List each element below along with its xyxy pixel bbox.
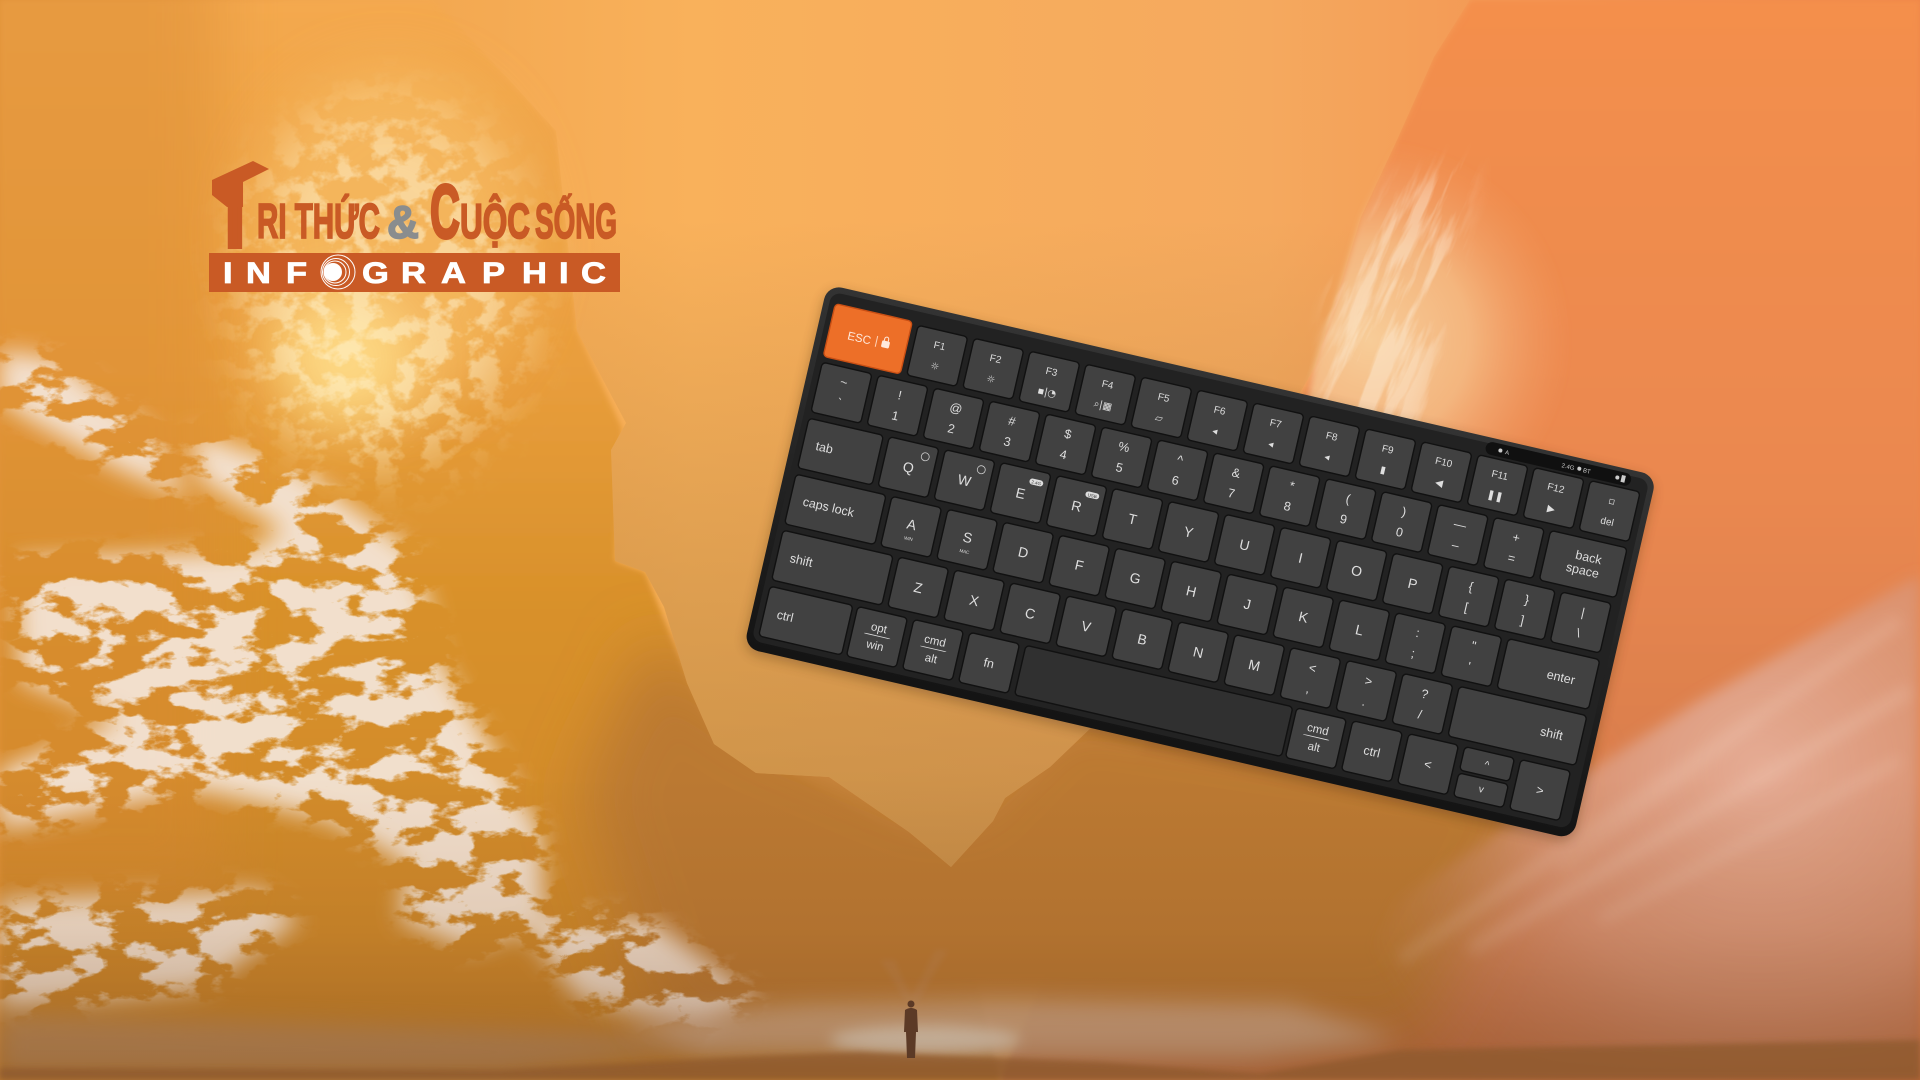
logo wordmark: SỐNG [535, 194, 617, 249]
logo banner: INFOGRAPHIC: INFOGRAPHIC [223, 256, 606, 289]
keyboard row: home keys: K [1297, 608, 1310, 626]
keyboard row: home keys: G [1128, 569, 1142, 587]
keyboard row: shift keys: V [1080, 617, 1093, 635]
keyboard row: number keys: 4 [1058, 447, 1068, 462]
keyboard row: home keys: L [1354, 621, 1365, 639]
keyboard row: function keys: ⌕|▦ [1093, 398, 1113, 413]
keyboard row: bottom modifier keys and arrows: alt [924, 652, 939, 667]
keyboard row: function keys: ❚❚ [1486, 489, 1504, 504]
keyboard row: shift keys: , [1305, 682, 1311, 696]
keyboard row: shift keys: > [1363, 674, 1374, 689]
keyboard row: function keys: F1 [932, 340, 947, 353]
keyboard row: home keys: ' [1466, 659, 1472, 674]
keyboard row: bottom modifier keys and arrows: fn [982, 655, 996, 671]
keyboard row: function keys: F2 [988, 353, 1003, 366]
keyboard row: function keys: F7 [1269, 418, 1283, 431]
keyboard row: number keys: 5 [1114, 460, 1124, 475]
keyboard row: shift keys: ? [1420, 687, 1430, 702]
keyboard row: QWERTY keys: O [1350, 562, 1364, 580]
keyboard row: function keys: ☼ [985, 374, 996, 386]
keyboard row: number keys: $ [1063, 427, 1073, 442]
keyboard row: QWERTY keys: R [1070, 497, 1083, 515]
logo: Tri thuc & Cuoc song Infographic [209, 161, 620, 292]
keyboard row: bottom modifier keys and arrows: ctrl [1362, 743, 1382, 760]
keyboard row: shift keys [772, 530, 1587, 765]
keyboard row: function keys: ▶ [1546, 503, 1556, 516]
keyboard status bar: A [1504, 450, 1510, 457]
keyboard row: number keys: ) [1401, 505, 1408, 519]
keyboard row: number keys: 3 [1002, 434, 1012, 449]
keyboard status bar [1484, 441, 1632, 487]
keyboard row: number keys: – [1450, 538, 1460, 553]
keyboard row: function keys: ▮ [1379, 465, 1387, 477]
keyboard row: QWERTY keys: { [1467, 580, 1475, 594]
keyboard row: number keys: % [1117, 439, 1131, 455]
keyboard row: function keys: F3 [1045, 366, 1059, 379]
keyboard row: function keys: ◀ [1434, 477, 1444, 490]
keyboard row: number keys: 7 [1226, 486, 1236, 501]
keyboard row: shift keys: shift [1539, 724, 1565, 743]
keyboard row: function keys: ◂ [1323, 452, 1331, 464]
keyboard row: QWERTY keys: USB [1087, 492, 1097, 499]
keyboard row: function keys: F8 [1325, 431, 1339, 444]
keyboard row: function keys [907, 325, 1640, 542]
keyboard row: number keys: * [1288, 479, 1296, 493]
key: ESC orange [823, 304, 912, 374]
keyboard row: home keys: A [905, 516, 919, 533]
keyboard row: number keys: 2 [946, 421, 956, 437]
keyboard row: function keys: ◂ [1267, 439, 1275, 451]
keyboard row: QWERTY keys: Y [1182, 523, 1196, 541]
keyboard row: number keys: — [1452, 517, 1468, 533]
keyboard row: number keys: 0 [1394, 525, 1404, 540]
keyboard row: shift keys: M [1247, 656, 1262, 674]
keyboard row: function keys: F10 [1434, 456, 1454, 470]
keyboard row: bottom modifier keys and arrows: v [1477, 784, 1485, 796]
keyboard row: shift keys: C [1023, 604, 1037, 622]
keyboard row: number keys: 9 [1338, 512, 1348, 527]
logo wordmark: RI THỨC [257, 194, 380, 249]
keyboard row: QWERTY keys [797, 418, 1611, 653]
keyboard row: home keys: " [1470, 639, 1477, 653]
keyboard row: shift keys: / [1417, 707, 1424, 722]
keyboard row: number keys: ( [1344, 492, 1353, 506]
keyboard row: QWERTY keys: [ [1463, 600, 1470, 615]
keyboard body [743, 284, 1657, 843]
keyboard row: home keys [785, 474, 1600, 709]
keyboard row: function keys: F11 [1490, 469, 1509, 483]
keyboard row: QWERTY keys: T [1127, 510, 1139, 528]
keyboard row: home keys: S [961, 529, 974, 546]
keyboard row: QWERTY keys: | [1580, 606, 1586, 620]
keyboard row: number keys: + [1511, 530, 1521, 545]
icon: person silhouette in the canyon [904, 1000, 918, 1058]
keyboard row: home keys: ; [1410, 646, 1416, 661]
keyboard row: bottom modifier keys and arrows [759, 586, 1571, 821]
keyboard row: number keys: space [1565, 560, 1600, 581]
keyboard row: number keys: back [1574, 548, 1604, 568]
keyboard row: function keys: ▱ [1154, 413, 1164, 425]
keyboard row: QWERTY keys: 2.4G [1031, 479, 1042, 487]
keyboard row: QWERTY keys: E [1014, 484, 1027, 502]
logo wordmark: UỘC [460, 194, 530, 249]
keyboard row: bottom modifier keys and arrows: > [1535, 783, 1545, 798]
keyboard row: number keys: ` [836, 396, 843, 410]
keyboard row: function keys: F5 [1157, 392, 1171, 405]
keyboard row: home keys: WIN [904, 535, 913, 542]
keyboard row: shift keys: . [1361, 695, 1367, 709]
keyboard row: function keys: del [1599, 515, 1615, 529]
keyboard row: number keys: ! [897, 388, 903, 403]
keyboard row: number keys: @ [948, 400, 964, 417]
keyboard row: shift keys: X [968, 592, 981, 609]
keyboard row: number keys: = [1506, 551, 1517, 566]
keyboard row: home keys: F [1073, 556, 1085, 574]
keyboard row: bottom modifier keys and arrows: opt [870, 621, 889, 637]
keyboard row: function keys: ▫ [1607, 496, 1616, 508]
logo wordmark: T [214, 160, 256, 269]
keyboard row: home keys: MAC [959, 548, 971, 555]
keyboard row: shift keys: Z [912, 579, 925, 596]
keyboard row: shift keys: B [1136, 630, 1149, 648]
keyboard row: QWERTY keys: W [956, 471, 973, 490]
key: ESC orange: ESC [846, 330, 872, 347]
keyboard row: home keys: H [1185, 582, 1198, 600]
keyboard row: function keys: F12 [1546, 482, 1566, 496]
keyboard status bar: 2.4G [1561, 463, 1575, 472]
keyboard status bar: BT [1582, 468, 1591, 476]
keyboard row: home keys: caps lock [801, 495, 856, 520]
keyboard row: number keys: & [1230, 465, 1242, 481]
keyboard row: bottom modifier keys and arrows: win [864, 638, 885, 654]
keyboard row: QWERTY keys: I [1297, 550, 1304, 566]
logo wordmark [212, 161, 616, 249]
keyboard row: bottom modifier keys and arrows: cmd [1306, 722, 1330, 738]
keyboard row: bottom modifier keys and arrows: < [1423, 757, 1433, 772]
keyboard row: number keys: 8 [1282, 499, 1292, 514]
keyboard row: QWERTY keys: P [1406, 575, 1419, 593]
keyboard row: bottom modifier keys and arrows: ctrl [775, 608, 795, 625]
keyboard row: number keys [811, 362, 1627, 598]
keyboard row: home keys: D [1017, 543, 1030, 561]
keyboard row: QWERTY keys: } [1523, 593, 1531, 607]
keyboard row: QWERTY keys: ] [1519, 613, 1526, 627]
keyboard row: function keys: F9 [1381, 443, 1395, 457]
keyboard row: bottom modifier keys and arrows: alt [1307, 740, 1322, 755]
keyboard row: number keys: ^ [1176, 453, 1185, 468]
keyboard row: shift keys: shift [788, 551, 814, 570]
keyboard row: function keys: F4 [1101, 379, 1115, 392]
keyboard row: number keys: 6 [1170, 473, 1180, 488]
keyboard row: home keys: enter [1545, 667, 1576, 687]
keyboard row: function keys: ▪|◔ [1036, 385, 1057, 400]
keyboard row: home keys: : [1414, 626, 1421, 640]
logo wordmark: C [430, 170, 460, 255]
keyboard row: QWERTY keys: tab [814, 439, 834, 457]
keyboard row: number keys: ~ [839, 375, 849, 390]
keyboard row: shift keys: < [1307, 661, 1318, 676]
keyboard row: bottom modifier keys and arrows: ^ [1483, 760, 1491, 771]
keyboard row: function keys: ◂ [1211, 426, 1218, 438]
keyboard row: QWERTY keys: Q [901, 458, 916, 476]
keyboard row: QWERTY keys: U [1238, 536, 1251, 554]
sky gap between canyon walls [434, 0, 1471, 867]
keyboard row: QWERTY keys: \ [1575, 626, 1582, 641]
keyboard row: number keys: 1 [890, 408, 900, 424]
keyboard row: shift keys: N [1192, 643, 1205, 661]
logo wordmark: & [387, 196, 419, 248]
keyboard row: number keys: # [1007, 414, 1017, 429]
keyboard row: bottom modifier keys and arrows: cmd [923, 633, 947, 650]
keyboard row: home keys: J [1242, 595, 1253, 613]
keyboard row: function keys: F6 [1213, 405, 1227, 418]
keyboard row: function keys: ☼ [929, 361, 940, 373]
